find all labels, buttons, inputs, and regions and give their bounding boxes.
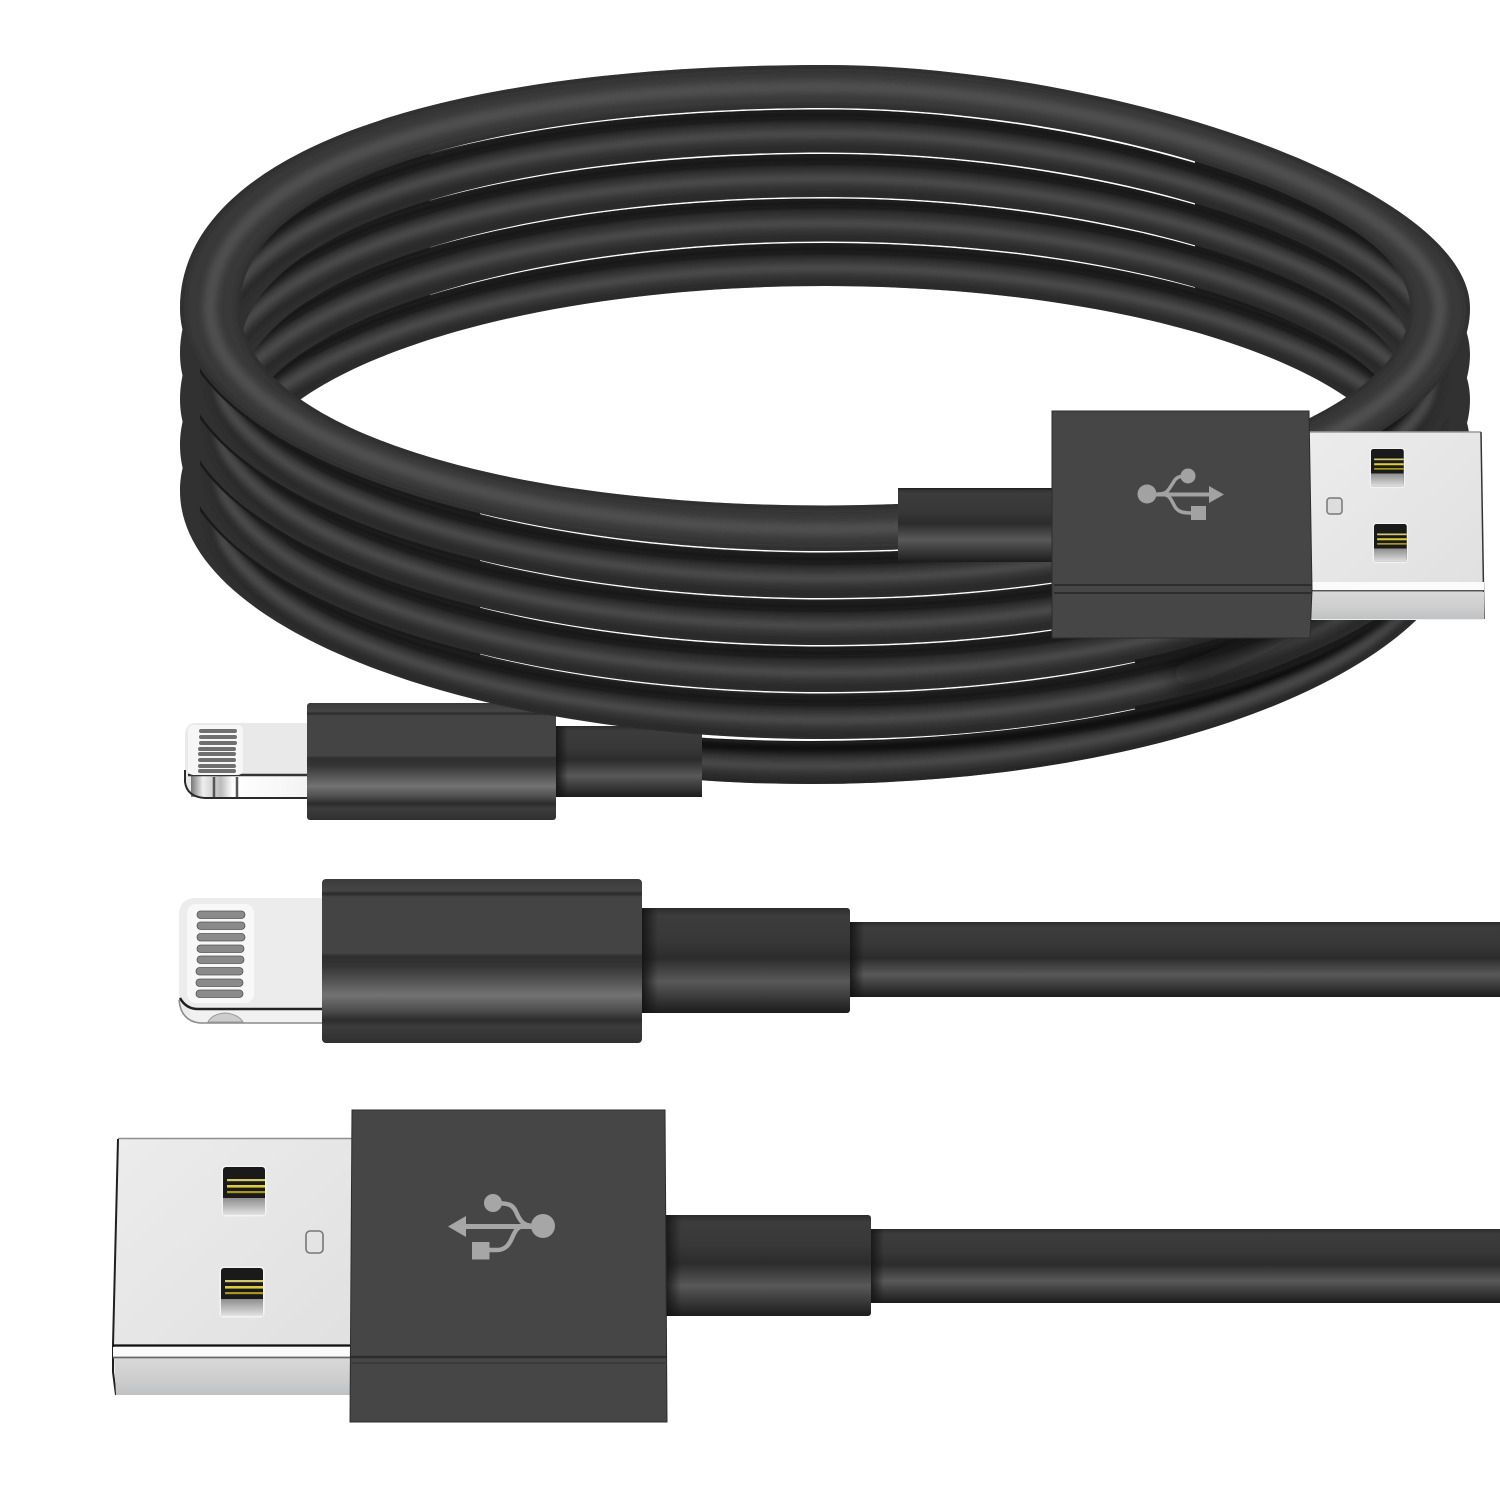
- top USB housing: [1052, 411, 1312, 638]
- small connector housing: [307, 703, 556, 820]
- large USB plug holes: [222, 1166, 266, 1216]
- top USB metal plug: [1307, 432, 1484, 620]
- top USB-A connector: [898, 411, 1484, 638]
- small connector metal tip: [185, 723, 310, 798]
- coil: third ring: [170, 140, 1480, 660]
- top USB plug holes: [1370, 448, 1405, 488]
- large USB trident symbol: [448, 1194, 555, 1260]
- coil: bottom ring: [180, 243, 1375, 739]
- large USB-A connector with straight cable: [113, 1110, 1500, 1422]
- small lightning connector: [185, 703, 702, 820]
- large USB strain relief: [663, 1215, 871, 1316]
- large USB small indicator: [306, 1231, 323, 1253]
- large connector housing: [322, 879, 642, 1043]
- lower straight cable: [870, 1229, 1500, 1303]
- straight cable: [850, 922, 1500, 997]
- top USB housing ridge: [1054, 585, 1312, 593]
- large connector metal tip: [179, 898, 324, 1023]
- large lightning connector with straight cable: [179, 879, 1500, 1043]
- small connector contact pins: [198, 729, 237, 773]
- large USB housing: [350, 1110, 667, 1422]
- large USB metal plug: [113, 1138, 354, 1395]
- cable tail leaving the coil toward the small lightning connector: [702, 620, 1416, 784]
- coil: top ring: [170, 50, 1480, 570]
- coil: fourth ring: [170, 185, 1480, 705]
- top USB small indicator: [1327, 498, 1342, 514]
- coil: second ring: [170, 95, 1480, 615]
- large connector contact pins: [196, 911, 245, 998]
- small connector strain relief: [556, 726, 702, 797]
- large USB housing ridge: [350, 1356, 667, 1358]
- top USB strain relief: [898, 488, 1053, 562]
- top USB trident symbol: [1138, 468, 1224, 520]
- large connector strain relief: [640, 908, 850, 1013]
- deep shadow on the lower right of the coil: [1135, 548, 1400, 708]
